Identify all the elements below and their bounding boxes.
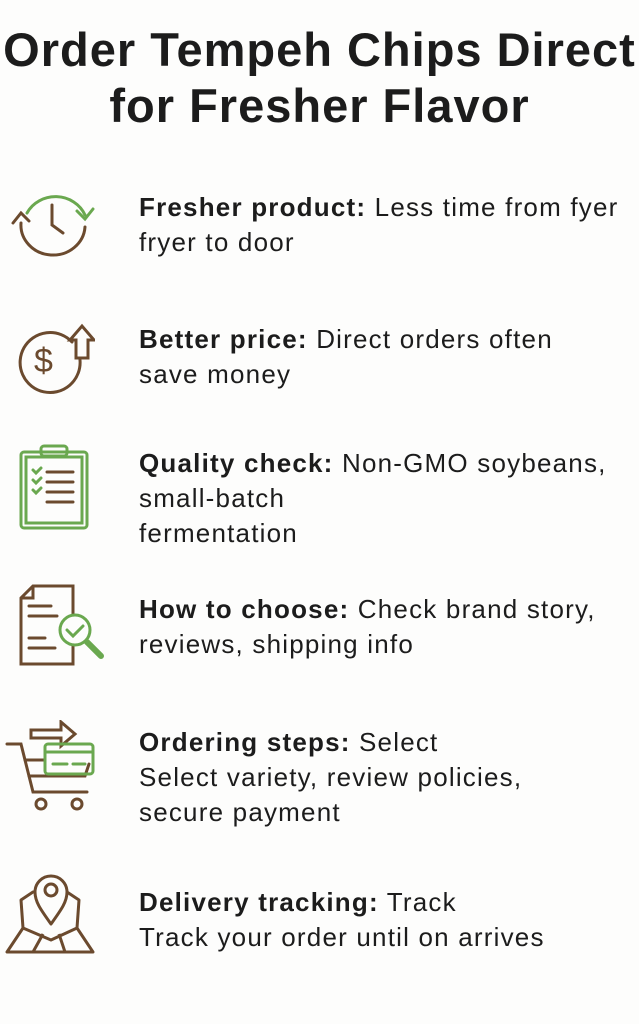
text: quality check: small-batch xyxy=(139,483,285,513)
icon: document magnifier xyxy=(20,584,104,666)
text: better price: Better price: Direct orders often xyxy=(139,324,553,354)
text: fresher product xyxy=(139,192,619,257)
text: how to choose xyxy=(139,594,596,659)
text: ordering steps: Ordering steps: Select xyxy=(139,727,438,757)
text: ordering steps: Select variety, review policies, xyxy=(139,762,522,792)
icon: cart with card xyxy=(6,720,94,810)
text: quality check: fermentation xyxy=(139,518,298,548)
text: delivery tracking: Track your order until on arrives xyxy=(139,922,545,952)
icon: map pin xyxy=(5,874,94,954)
text: ordering steps: secure payment xyxy=(139,797,341,827)
text: quality check: Quality check: Non-GMO soybeans, xyxy=(139,448,607,478)
icon: clock refresh xyxy=(11,195,95,256)
text: delivery tracking: Delivery tracking: Track xyxy=(139,887,457,917)
text: better price xyxy=(139,324,553,389)
text: delivery tracking xyxy=(139,887,545,952)
title xyxy=(3,23,636,132)
icon: dollar price: $ xyxy=(34,342,53,380)
text: ordering steps xyxy=(139,727,522,827)
icon: clipboard xyxy=(20,444,88,530)
text: fresher product: Fresher product: Less time from fyer xyxy=(139,192,619,222)
icon: dollar price xyxy=(18,324,95,394)
text: better price: save money xyxy=(139,359,291,389)
text: quality check xyxy=(139,448,607,548)
text: how to choose: How to choose: Check brand story, xyxy=(139,594,596,624)
text: how to choose: reviews, shipping info xyxy=(139,629,414,659)
title: for Fresher Flavor xyxy=(109,79,530,132)
title: Order Tempeh Chips Direct xyxy=(3,23,636,76)
text: fresher product: fryer to door xyxy=(139,227,295,257)
